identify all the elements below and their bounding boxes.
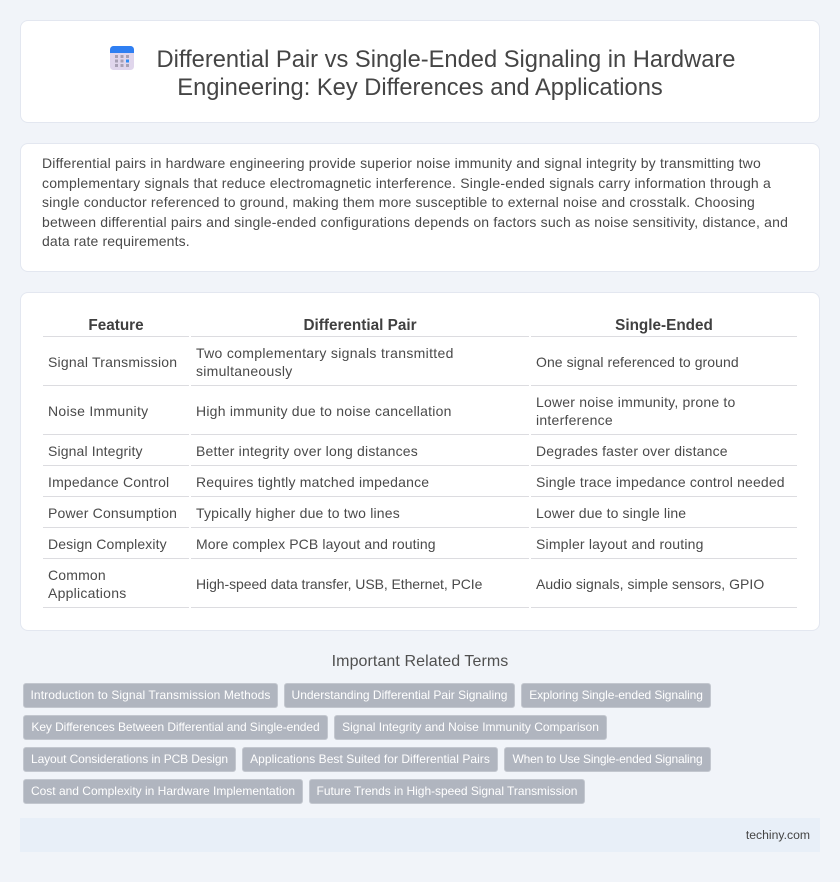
related terms tags [23,683,711,804]
tag: Key Differences Between Differential and Single-ended [31,720,320,734]
footer bar [20,818,820,852]
row: power consumption: Lower due to single line [536,505,686,521]
row: noise immunity: Lower noise immunity, prone to [536,394,736,410]
comparison table [43,317,797,608]
row: impedance control [48,474,785,490]
icon: calendar [110,46,134,70]
comparison table panel [20,292,820,631]
tag [23,747,236,772]
summary panel [20,143,820,272]
row: noise immunity: Noise Immunity [48,403,148,419]
tag: Future Trends in High-speed Signal Transmission [317,784,577,798]
row: impedance control: Requires tightly matched impedance [196,474,429,490]
row: common applications [48,567,764,601]
row: signal integrity [48,443,728,459]
table header: Differential Pair [303,317,417,334]
row: signal transmission: simultaneously [196,363,293,379]
summary text: complementary signals that reduce electromagnetic interference. Single-ended signals carry information through a [42,175,771,191]
tag: Layout Considerations in PCB Design [31,752,228,766]
related terms heading: Important Related Terms [332,653,508,670]
row: design complexity: Design Complexity [48,536,167,552]
tag [23,715,328,740]
row: signal transmission [48,345,739,379]
row: common applications: Applications [48,585,126,601]
tag [309,779,585,804]
row: power consumption: Power Consumption [48,505,177,521]
table header: Single-Ended [615,317,713,334]
row: power consumption [48,505,686,521]
tag: Applications Best Suited for Differential Pairs [250,752,490,766]
title: Engineering: Key Differences and Applications [177,75,663,101]
row: signal transmission: Two complementary signals transmitted [196,345,454,361]
row: impedance control: Single trace impedance control needed [536,474,785,490]
tag [504,747,711,772]
summary text [42,155,788,249]
tag: Exploring Single-ended Signaling [529,688,703,702]
row: signal integrity: Degrades faster over distance [536,443,728,459]
tag: Understanding Differential Pair Signaling [292,688,507,702]
row: noise immunity [48,394,736,428]
tag [334,715,607,740]
row: power consumption: Typically higher due to two lines [196,505,400,521]
tag [23,779,303,804]
row: design complexity [48,536,704,552]
tag: Cost and Complexity in Hardware Implementation [31,784,295,798]
row: signal transmission: Signal Transmission [48,354,177,370]
row: noise immunity: interference [536,412,613,428]
row: signal transmission: One signal referenced to ground [536,354,739,370]
tag [284,683,515,708]
row: design complexity: More complex PCB layout and routing [196,536,436,552]
summary text: single conductor referenced to ground, making them more susceptible to external noise and crosstalk. Choosing [42,194,755,210]
header panel [20,20,820,123]
summary text: data rate requirements. [42,233,190,249]
row: common applications: High-speed data transfer, USB, Ethernet, PCIe [196,576,482,592]
row: noise immunity: High immunity due to noise cancellation [196,403,452,419]
tag [521,683,711,708]
tag [242,747,498,772]
row: common applications: Common [48,567,106,583]
summary text: between differential pairs and single-ended configurations depends on factors such as noise sensitivity, distance, and [42,214,788,230]
footer brand: techiny.com [746,828,810,842]
tag [23,683,278,708]
tag: Signal Integrity and Noise Immunity Comparison [342,720,599,734]
title [157,47,735,101]
row: signal integrity: Signal Integrity [48,443,143,459]
title: Differential Pair vs Single-Ended Signaling in Hardware [157,47,735,73]
tag: Introduction to Signal Transmission Methods [30,688,270,702]
table header: Feature [88,317,144,334]
tag: When to Use Single-ended Signaling [512,752,702,766]
row: impedance control: Impedance Control [48,474,169,490]
row: common applications: Audio signals, simple sensors, GPIO [536,576,764,592]
row: signal integrity: Better integrity over long distances [196,443,418,459]
summary text: Differential pairs in hardware engineering provide superior noise immunity and signal integrity by transmitting two [42,155,761,171]
table header [88,317,713,334]
row: design complexity: Simpler layout and routing [536,536,704,552]
